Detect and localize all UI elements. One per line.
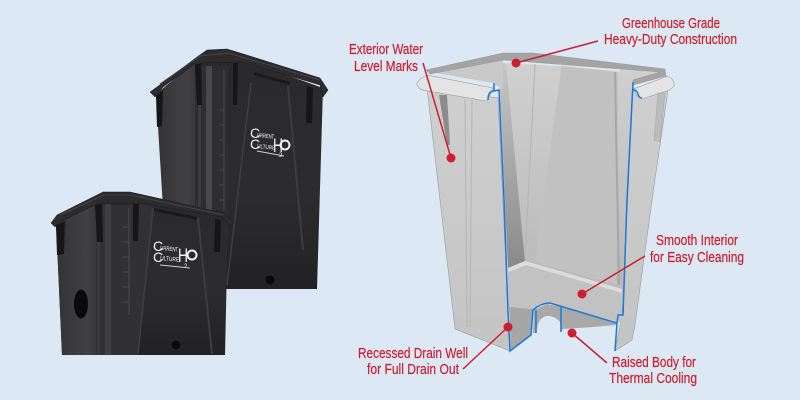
callout: Raised Body for Thermal Cooling	[568, 328, 697, 387]
right lip section	[633, 90, 642, 98]
interior back wall	[499, 63, 665, 300]
callout: Greenhouse Grade Heavy-Duty Construction: Heavy-Duty Construction	[604, 32, 737, 48]
blue cut lines	[488, 82, 642, 351]
callout: Recessed Drain Well for Full Drain Out	[358, 322, 512, 378]
bucket body	[56, 196, 228, 355]
rear rim	[426, 53, 666, 85]
logo: URRENT	[160, 246, 179, 254]
drain hole	[266, 276, 274, 284]
central raised panel	[535, 62, 618, 285]
raised body underside	[533, 304, 617, 333]
callout: Exterior Water Level Marks: Exterior Water	[349, 42, 423, 58]
bucket body	[156, 54, 323, 289]
callout: Greenhouse Grade Heavy-Duty Construction	[512, 16, 737, 68]
logo: 2	[279, 153, 283, 159]
interior left shading	[499, 63, 525, 268]
left face	[56, 200, 97, 355]
right handle lip	[634, 76, 674, 99]
logo: ULTURE	[257, 144, 275, 152]
logo: C	[153, 249, 163, 265]
logo: H	[273, 136, 283, 157]
wall ribs	[439, 95, 450, 145]
callout: Smooth Interior for Easy Cleaning: Smooth Interior	[656, 233, 738, 249]
interior floor	[508, 262, 622, 323]
rear-left interior	[430, 60, 503, 90]
callout: Raised Body for Thermal Cooling: Raised Body for	[612, 355, 696, 371]
corner ribs	[195, 66, 228, 240]
slanted panel lines	[227, 83, 251, 285]
handle tabs	[156, 63, 313, 127]
drain hole	[172, 340, 180, 350]
outer right wall	[615, 88, 668, 351]
callout: Smooth Interior for Easy Cleaning	[578, 233, 744, 298]
logo: C	[153, 238, 163, 254]
grey cutaway bucket	[417, 53, 674, 351]
logo: C	[250, 125, 260, 141]
side opening	[74, 290, 88, 318]
logo: ULTURE	[160, 256, 179, 264]
right wall section	[617, 82, 633, 323]
water level marks	[123, 208, 129, 315]
logo: C	[250, 136, 260, 152]
logo: URRENT	[257, 133, 275, 141]
handle tabs	[56, 204, 221, 255]
callout: Greenhouse Grade Heavy-Duty Construction: Greenhouse Grade	[622, 16, 720, 32]
callout: Smooth Interior for Easy Cleaning: for Easy Cleaning	[650, 250, 744, 266]
rim	[150, 49, 328, 97]
back black bucket	[150, 49, 328, 289]
corner ribs	[96, 205, 153, 355]
callout: Recessed Drain Well for Full Drain Out: for Full Drain Out	[367, 362, 459, 378]
callout: Recessed Drain Well for Full Drain Out: Recessed Drain Well	[358, 346, 468, 362]
callout: Exterior Water Level Marks: Level Marks	[354, 59, 418, 75]
front black bucket	[51, 192, 234, 355]
logo	[153, 238, 196, 270]
rim	[51, 192, 234, 227]
slanted panel lines	[138, 208, 153, 354]
outer left wall	[427, 88, 510, 351]
drain well underside	[509, 307, 533, 351]
left handle lip	[417, 75, 493, 101]
callout: Exterior Water Level Marks	[349, 42, 456, 162]
left wall section	[488, 90, 617, 351]
left face	[156, 62, 197, 240]
drain well legs	[494, 83, 561, 333]
logo	[250, 125, 290, 159]
water level marks	[219, 70, 224, 210]
callout: Raised Body for Thermal Cooling: Thermal Cooling	[609, 371, 697, 387]
logo: 2	[184, 264, 188, 270]
logo: H	[178, 246, 188, 267]
